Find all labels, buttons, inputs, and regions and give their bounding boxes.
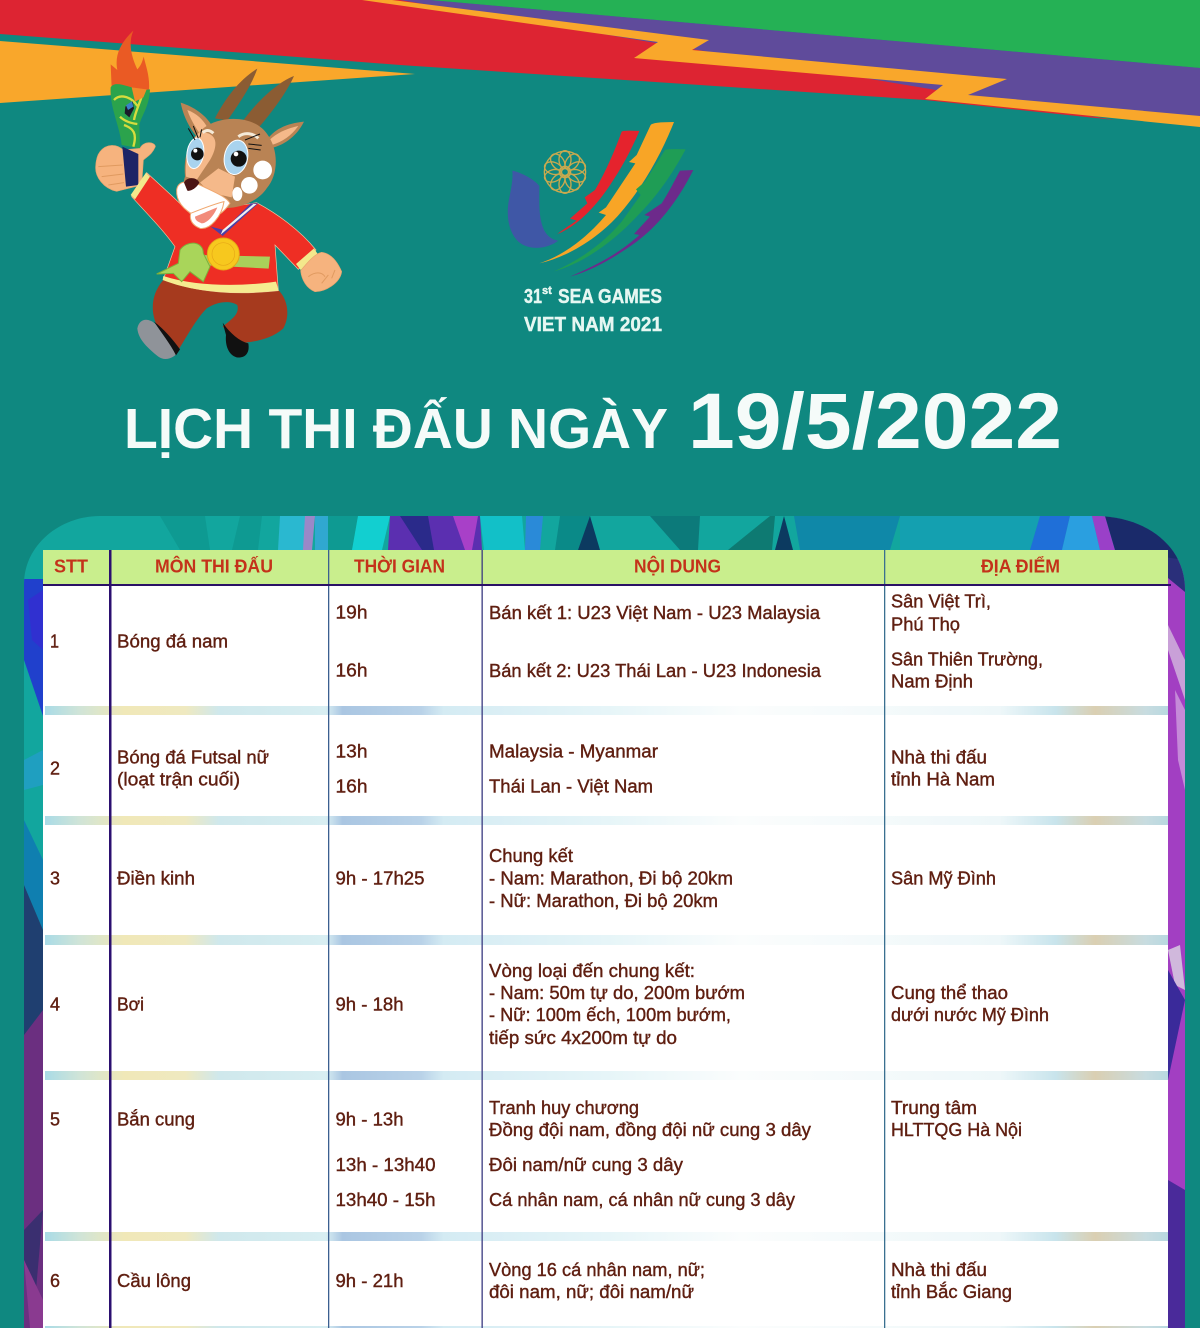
row 3: Điền kinh xyxy=(50,845,996,911)
row 3: Điền kinh: Điền kinh xyxy=(117,868,195,888)
row 2: Bóng đá Futsal nữ: Malaysia - Myanmar xyxy=(489,740,658,762)
row 3: Điền kinh: Sân Mỹ Đình xyxy=(891,868,996,888)
lower hand xyxy=(301,252,342,292)
row 2: Bóng đá Futsal nữ: tỉnh Hà Nam xyxy=(891,768,995,790)
row 5: Bắn cung: 9h - 13h xyxy=(336,1108,404,1130)
row 3: Điền kinh: - Nữ: Marathon, Đi bộ 20km xyxy=(489,890,718,911)
row 5: Bắn cung: Bắn cung xyxy=(117,1108,195,1130)
column lines xyxy=(43,550,1171,1328)
row 1: Bóng đá nam: Sân Việt Trì, xyxy=(891,590,991,612)
row 4: Bơi: Vòng loại đến chung kết: xyxy=(489,960,695,981)
row 5: Bắn cung: Trung tâm xyxy=(891,1097,977,1118)
mascot: deer with torch xyxy=(96,31,342,359)
purple bolt xyxy=(570,170,693,277)
row 3: Điền kinh: 3 xyxy=(50,868,60,888)
red bolt xyxy=(557,131,639,234)
logo text: SEA GAMES xyxy=(558,286,662,308)
row 5: Bắn cung: Cá nhân nam, cá nhân nữ cung 3 dây xyxy=(489,1189,796,1210)
logo: 31st SEA Games xyxy=(508,122,693,277)
top decorative ribbons xyxy=(0,0,1200,127)
logo text xyxy=(524,285,662,336)
title xyxy=(124,376,1062,465)
row 5: Bắn cung: 13h40 - 15h xyxy=(336,1189,436,1210)
row 2: Bóng đá Futsal nữ: 16h xyxy=(336,776,368,796)
row 6: Cầu lông: đôi nam, nữ; đôi nam/nữ xyxy=(489,1281,694,1302)
row 1: Bóng đá nam: Phú Thọ xyxy=(891,614,960,634)
schedule table xyxy=(43,550,1171,1328)
row 5: Bắn cung: Tranh huy chương xyxy=(489,1097,639,1118)
header labels: STT xyxy=(54,556,88,576)
gold medal xyxy=(207,203,258,270)
header labels xyxy=(54,556,1060,576)
row divider bands xyxy=(45,706,1168,1328)
row 3: Điền kinh: Chung kết xyxy=(489,845,573,866)
row 4: Bơi: 4 xyxy=(50,994,60,1014)
blue U xyxy=(508,171,558,248)
row 2: Bóng đá Futsal nữ: 2 xyxy=(50,758,60,778)
row 6: Cầu lông: 6 xyxy=(50,1270,60,1291)
row 1: Bóng đá nam: 1 xyxy=(50,630,59,652)
logo text: st xyxy=(542,285,552,297)
row 6: Cầu lông: Cầu lông xyxy=(117,1270,191,1291)
row 1: Bóng đá nam: 16h xyxy=(336,660,368,680)
table white body xyxy=(43,550,1168,1328)
row 1: Bóng đá nam: Bóng đá nam xyxy=(117,630,228,652)
row 1: Bóng đá nam: Bán kết 2: U23 Thái Lan - U23 Indonesia xyxy=(489,660,822,681)
head xyxy=(177,69,304,228)
row 2: Bóng đá Futsal nữ: Bóng đá Futsal nữ xyxy=(117,746,269,768)
row 6: Cầu lông: 9h - 21h xyxy=(336,1270,404,1291)
header labels: NỘI DUNG xyxy=(634,556,721,576)
row 5: Bắn cung xyxy=(50,1097,1022,1210)
green bolt xyxy=(553,149,686,272)
row 1: Bóng đá nam: Sân Thiên Trường, xyxy=(891,648,1043,670)
row 4: Bơi: Cung thể thao xyxy=(891,982,1008,1003)
row 6: Cầu lông: Nhà thi đấu xyxy=(891,1259,987,1280)
header bar xyxy=(43,550,1168,584)
row 5: Bắn cung: 5 xyxy=(50,1108,60,1130)
row 4: Bơi: tiếp sức 4x200m tự do xyxy=(489,1027,677,1048)
gold rosette xyxy=(543,151,587,193)
header labels: THỜI GIAN xyxy=(354,556,445,576)
title: 19/5/2022 xyxy=(688,376,1062,465)
raised hand xyxy=(96,143,155,191)
row 5: Bắn cung: Đôi nam/nữ cung 3 dây xyxy=(489,1154,684,1175)
row 4: Bơi: - Nam: 50m tự do, 200m bướm xyxy=(489,982,745,1003)
row 1: Bóng đá nam: 19h xyxy=(336,602,368,622)
row 6: Cầu lông: Vòng 16 cá nhân nam, nữ; xyxy=(489,1259,705,1280)
row 5: Bắn cung: HLTTQG Hà Nội xyxy=(891,1119,1022,1140)
row 4: Bơi: Bơi xyxy=(117,994,144,1014)
row 4: Bơi: 9h - 18h xyxy=(336,994,404,1014)
row 2: Bóng đá Futsal nữ: Nhà thi đấu xyxy=(891,746,987,768)
title: LỊCH THI ĐẤU NGÀY xyxy=(124,396,668,461)
row 4: Bơi: dưới nước Mỹ Đình xyxy=(891,1004,1049,1025)
row 4: Bơi xyxy=(50,960,1049,1048)
row 3: Điền kinh: 9h - 17h25 xyxy=(336,868,424,888)
logo text: VIET NAM 2021 xyxy=(524,314,662,336)
row 2: Bóng đá Futsal nữ: 13h xyxy=(336,740,368,762)
logo text: 31 xyxy=(524,286,542,308)
legs and trousers xyxy=(137,280,287,359)
row 1: Bóng đá nam xyxy=(50,590,1043,692)
row 5: Bắn cung: Đồng đội nam, đồng đội nữ cung 3 dây xyxy=(489,1119,812,1140)
row 2: Bóng đá Futsal nữ: (loạt trận cuối) xyxy=(117,768,240,790)
header band polygons xyxy=(160,516,210,550)
row 1: Bóng đá nam: Bán kết 1: U23 Việt Nam - U23 Malaysia xyxy=(489,602,821,623)
row 4: Bơi: - Nữ: 100m ếch, 100m bướm, xyxy=(489,1004,731,1025)
torch xyxy=(111,31,150,148)
row 6: Cầu lông: tỉnh Bắc Giang xyxy=(891,1281,1012,1302)
row 2: Bóng đá Futsal nữ xyxy=(50,740,995,796)
row 5: Bắn cung: 13h - 13h40 xyxy=(336,1154,436,1175)
header labels: MÔN THI ĐẤU xyxy=(155,556,273,576)
row 6: Cầu lông xyxy=(50,1259,1012,1302)
header labels: ĐỊA ĐIỂM xyxy=(981,556,1060,576)
row 3: Điền kinh: - Nam: Marathon, Đi bộ 20km xyxy=(489,868,733,888)
table backdrop: geometric panel xyxy=(24,516,1185,1328)
red shirt xyxy=(131,173,318,293)
orange bolt xyxy=(539,122,674,263)
row 1: Bóng đá nam: Nam Định xyxy=(891,670,973,692)
row 2: Bóng đá Futsal nữ: Thái Lan - Việt Nam xyxy=(489,776,653,796)
